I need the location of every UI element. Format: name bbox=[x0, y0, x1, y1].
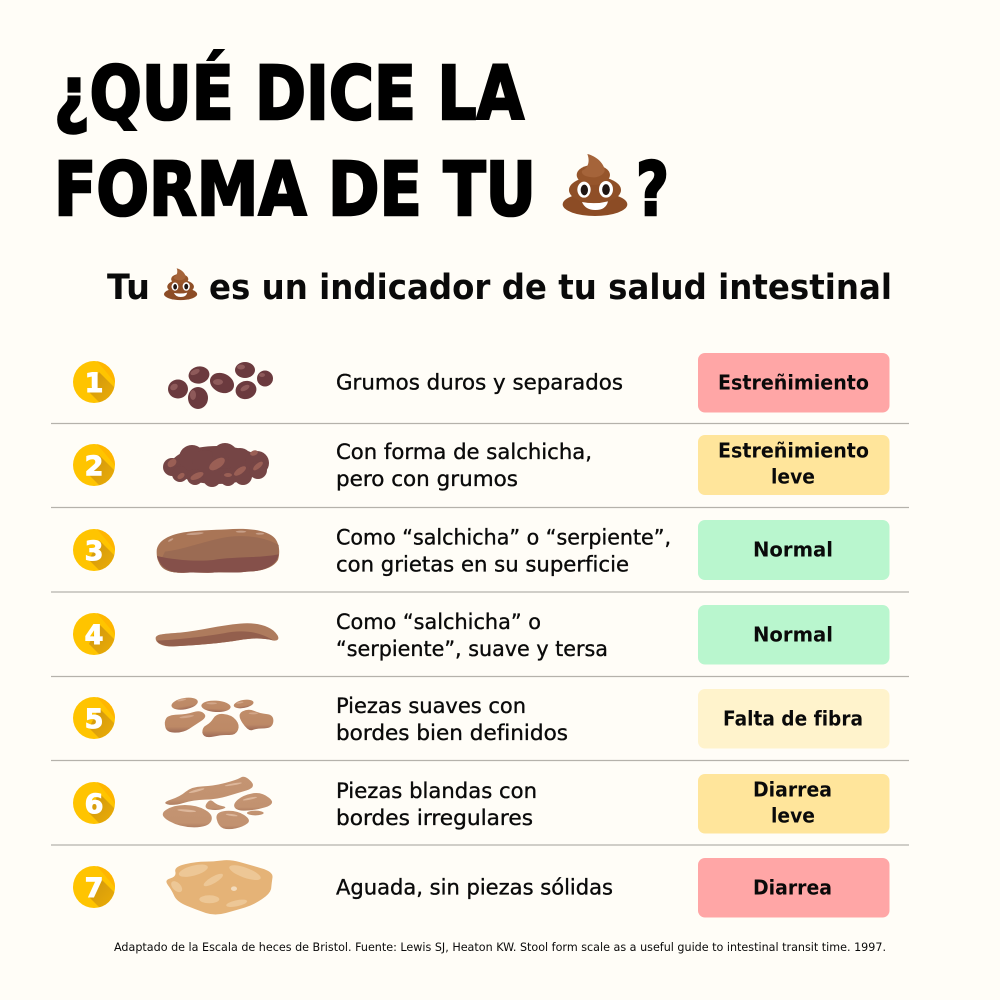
description: Como “salchicha” o “serpiente”, bbox=[336, 526, 671, 550]
row 2 bbox=[73, 435, 890, 495]
icon: number 3: 3 bbox=[85, 536, 103, 567]
illustration: type 1 hard lumps bbox=[168, 362, 273, 409]
badge: Estreñimiento leve bbox=[698, 435, 890, 495]
icon: number 4: 4 bbox=[85, 620, 103, 651]
description: pero con grumos bbox=[336, 467, 518, 491]
badge: Estreñimiento bbox=[698, 353, 890, 412]
icon: number 5 bbox=[73, 697, 115, 739]
subtitle: es un indicador de tu salud intestinal bbox=[209, 268, 892, 308]
description bbox=[336, 526, 671, 576]
illustration: type 7 watery puddle bbox=[166, 860, 273, 914]
badge: Estreñimiento leve: leve bbox=[771, 464, 815, 488]
badge: Normal bbox=[698, 520, 890, 580]
title bbox=[54, 49, 669, 233]
badge: Falta de fibra: Falta de fibra bbox=[723, 706, 863, 730]
title: FORMA DE TU bbox=[54, 147, 536, 233]
illustration: type 6 mushy pieces bbox=[163, 777, 272, 829]
icon: number 2 bbox=[73, 444, 115, 486]
badge: Estreñimiento leve: Estreñimiento bbox=[718, 438, 869, 462]
subtitle: Tu bbox=[107, 268, 150, 308]
badge: Estreñimiento: Estreñimiento bbox=[718, 370, 869, 394]
description bbox=[336, 779, 537, 830]
badge: Normal: Normal bbox=[753, 622, 833, 646]
illustration: type 4 smooth snake bbox=[156, 623, 278, 646]
description: Grumos duros y separados bbox=[336, 370, 623, 394]
badge: Normal: Normal bbox=[753, 538, 833, 562]
icon: number 1: 1 bbox=[85, 368, 103, 399]
description: bordes bien definidos bbox=[336, 721, 568, 745]
icon: number 6 bbox=[73, 782, 115, 824]
badge: Diarrea: Diarrea bbox=[753, 876, 832, 900]
title: ¿QUÉ DICE LA bbox=[54, 49, 524, 137]
description: Aguada, sin piezas sólidas bbox=[336, 876, 613, 900]
icon: number 4 bbox=[73, 613, 115, 655]
icon: number 3 bbox=[73, 529, 115, 571]
row 4 bbox=[73, 605, 890, 664]
icon: number 5: 5 bbox=[85, 704, 103, 735]
row 7 bbox=[73, 858, 890, 918]
source footnote: Adaptado de la Escala de heces de Bristol. Fuente: Lewis SJ, Heaton KW. Stool form scale as a useful guide to intestinal transit time. 1997. bbox=[114, 940, 886, 954]
row 3 bbox=[73, 520, 890, 580]
icon: number 7: 7 bbox=[85, 873, 103, 904]
description bbox=[336, 610, 608, 661]
icon: number 6: 6 bbox=[85, 789, 103, 820]
description: Como “salchicha” o bbox=[336, 610, 541, 634]
illustration: type 3 cracked sausage bbox=[157, 529, 279, 573]
badge: Diarrea leve bbox=[698, 774, 890, 834]
illustration: type 2 lumpy sausage bbox=[163, 443, 269, 487]
row 6 bbox=[73, 774, 890, 834]
badge: Diarrea leve: Diarrea bbox=[753, 778, 832, 802]
description: bordes irregulares bbox=[336, 806, 533, 830]
icon: number 2: 2 bbox=[85, 451, 103, 482]
badge: Falta de fibra bbox=[698, 689, 890, 748]
icon: poop emoji in subtitle bbox=[164, 268, 197, 300]
icon: number 1 bbox=[73, 361, 115, 403]
description: con grietas en su superficie bbox=[336, 552, 629, 576]
description: “serpiente”, suave y tersa bbox=[336, 637, 608, 661]
description bbox=[336, 694, 568, 745]
badge: Diarrea leve: leve bbox=[771, 804, 815, 828]
illustration: type 5 soft pieces bbox=[165, 696, 273, 737]
row 5 bbox=[73, 689, 890, 748]
description bbox=[336, 440, 592, 491]
description: Piezas suaves con bbox=[336, 694, 526, 718]
icon: number 7 bbox=[73, 866, 115, 908]
description: Piezas blandas con bbox=[336, 779, 537, 803]
badge: Diarrea bbox=[698, 858, 890, 918]
icon: poop emoji in title bbox=[563, 154, 627, 216]
title: ? bbox=[636, 147, 669, 233]
badge: Normal bbox=[698, 605, 890, 664]
row 1 bbox=[73, 353, 890, 412]
description: Con forma de salchicha, bbox=[336, 440, 592, 464]
